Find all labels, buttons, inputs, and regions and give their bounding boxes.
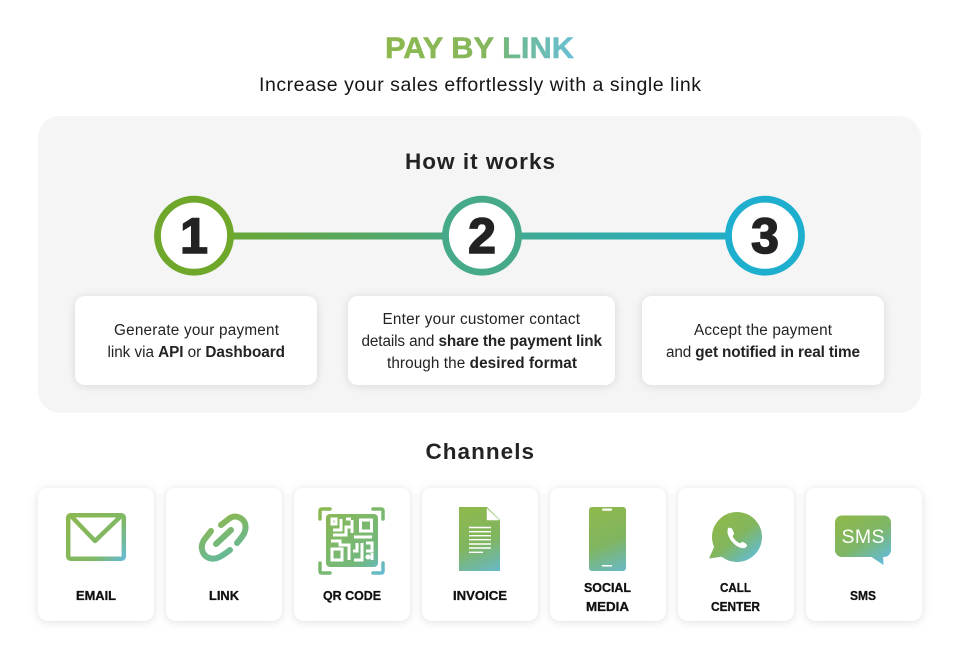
heading: channels: Channels <box>426 439 534 464</box>
step 2 card: Enter your customer contact <box>382 311 581 328</box>
step connector line <box>194 232 765 240</box>
step 3 card: Accept the payment <box>694 322 833 339</box>
label: email: EMAIL <box>76 588 116 603</box>
label: qr code: QR CODE <box>323 588 381 603</box>
icon: sms bubble: SMS <box>842 526 884 548</box>
channel: invoice <box>422 488 538 621</box>
channel: email <box>38 488 154 621</box>
step 2 card: details and share the payment link <box>362 333 602 350</box>
channel: social media <box>550 488 666 621</box>
heading: how it works: How it works <box>405 149 555 174</box>
step 1 card: link via API or Dashboard <box>108 344 285 361</box>
channel: qr code <box>294 488 410 621</box>
label: link: LINK <box>209 588 240 603</box>
icon: document <box>459 507 500 571</box>
panel: how it works <box>38 116 921 413</box>
title: PAY BY LINK <box>385 32 574 65</box>
label: social media <box>584 580 631 614</box>
label: call center: CENTER <box>711 599 761 614</box>
step 1 badge: 1 <box>180 208 208 264</box>
label: sms: SMS <box>850 588 876 603</box>
step 1 card: Generate your payment <box>114 322 280 339</box>
icon: envelope <box>68 515 124 559</box>
step 2 badge <box>446 199 518 272</box>
icon: chain link <box>202 517 246 559</box>
label: invoice: INVOICE <box>453 588 507 603</box>
step 2 card <box>348 296 615 385</box>
step 2 card: through the desired format <box>387 355 577 372</box>
step 2 badge: 2 <box>468 208 496 264</box>
icon: smartphone <box>589 507 626 571</box>
icon: phone chat bubble <box>709 512 762 562</box>
label: call center: CALL <box>720 580 751 595</box>
step 3 badge: 3 <box>751 208 779 264</box>
channel: call center <box>678 488 794 621</box>
step 3 badge <box>728 199 802 272</box>
label: call center <box>711 580 761 614</box>
icon: qr code <box>320 509 383 573</box>
step 1 badge <box>158 199 230 272</box>
subtitle: Increase your sales effortlessly with a single link <box>259 74 701 96</box>
label: social media: SOCIAL <box>584 580 631 595</box>
channel: sms <box>806 488 922 621</box>
step 1 card <box>75 296 317 385</box>
step 3 card <box>642 296 884 385</box>
label: social media: MEDIA <box>586 599 630 614</box>
step 3 card: and get notified in real time <box>666 344 860 361</box>
channel: link <box>166 488 282 621</box>
